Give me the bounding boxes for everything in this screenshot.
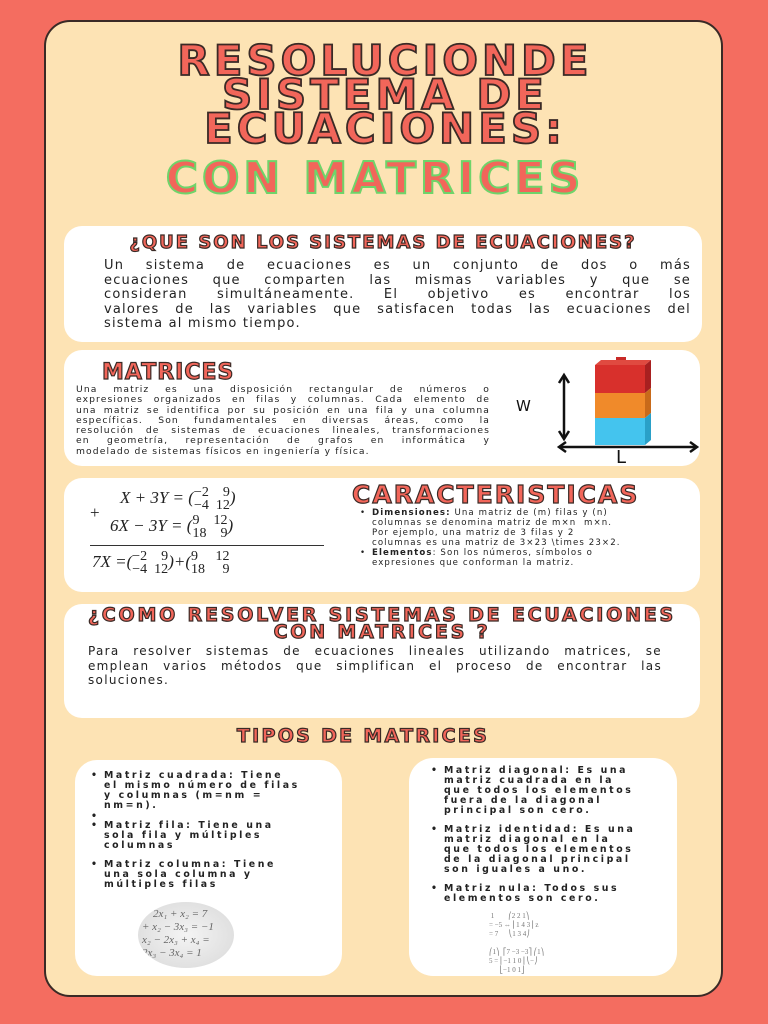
list: fuera de la diagonal bbox=[444, 795, 602, 806]
list: • bbox=[91, 859, 100, 870]
text bbox=[76, 384, 490, 457]
icon: stacked blocks: W bbox=[516, 397, 531, 415]
list: que todos los elementos bbox=[444, 785, 633, 796]
bullet text: columnas es una matriz de 3×23 \times 23×2. bbox=[372, 538, 621, 548]
list bbox=[431, 765, 635, 904]
panel: caracteristicas bbox=[64, 478, 700, 592]
list: Matriz cuadrada: Tiene bbox=[104, 770, 283, 781]
equations: −2 9 bbox=[132, 549, 168, 564]
list: que todos los elementos bbox=[444, 844, 633, 855]
image: equations circle bbox=[138, 902, 234, 968]
equations: 9 12 bbox=[191, 549, 229, 564]
panel: como resolver bbox=[64, 604, 700, 718]
equations: X + 3Y = ( ) bbox=[120, 488, 236, 507]
equations: 18 9 bbox=[191, 562, 229, 577]
equations: + bbox=[90, 503, 100, 522]
bullet text: Por ejemplo, una matriz de 3 filas y 2 bbox=[372, 528, 574, 538]
list: matriz diagonal en la bbox=[444, 834, 610, 845]
text: emplean varios métodos que simplifican el proceso de encontrar las bbox=[88, 658, 662, 672]
text: soluciones. bbox=[88, 673, 169, 687]
list: • bbox=[91, 811, 100, 822]
bullet text: Elementos: Son los números, símbolos o bbox=[372, 548, 593, 558]
list: son iguales a uno. bbox=[444, 864, 587, 875]
text: una matriz se identifica por su posición en una fila y una columna bbox=[76, 405, 490, 416]
text: ecuaciones que comparten las mismas variables y que se bbox=[104, 272, 691, 288]
list: elementos son cero. bbox=[444, 893, 600, 904]
bullet text: expresiones que conforman la matriz. bbox=[372, 558, 574, 568]
list: • bbox=[431, 765, 440, 776]
list: una sola columna y bbox=[104, 869, 253, 880]
text: Un sistema de ecuaciones es un conjunto de dos o más bbox=[104, 258, 691, 273]
bullet text: • bbox=[360, 508, 366, 518]
list bbox=[91, 770, 300, 890]
heading bbox=[88, 604, 676, 643]
text: Para resolver sistemas de ecuaciones lineales utilizando matrices, se bbox=[88, 644, 662, 658]
title: ECUACIONES: bbox=[204, 104, 566, 153]
title: SISTEMA DE bbox=[222, 70, 548, 119]
image: matrices: = −5 ⇔ ⎜1 4 3⎟ z bbox=[489, 921, 539, 929]
title bbox=[177, 36, 593, 153]
list: de la diagonal principal bbox=[444, 854, 631, 865]
list: Matriz identidad: Es una bbox=[444, 824, 635, 835]
image: matrices bbox=[489, 911, 544, 974]
image: matrices: ⎛1⎞ ⎡7 −3 −3⎤ ⎛1⎞ bbox=[489, 948, 544, 956]
equations bbox=[90, 485, 324, 577]
list: • bbox=[431, 824, 440, 835]
list: sola fila y múltiples bbox=[104, 830, 262, 841]
list: columnas bbox=[104, 840, 175, 851]
text: modelado de sistemas físicos en ingeniería y física. bbox=[76, 446, 370, 457]
list: • bbox=[91, 770, 100, 781]
equations: −2 9 bbox=[194, 485, 230, 500]
panel: que son bbox=[64, 226, 702, 342]
list: matriz cuadrada en la bbox=[444, 775, 614, 786]
heading: CON MATRICES ? bbox=[274, 621, 490, 643]
equations: 7X =( )+( bbox=[92, 552, 191, 571]
list: • bbox=[431, 883, 440, 894]
heading: MATRICES bbox=[102, 360, 234, 385]
list: Matriz nula: Todos sus bbox=[444, 883, 619, 894]
bullet text: columnas se denomina matriz de m×n m×n. bbox=[372, 518, 612, 528]
subtitle: CON MATRICES bbox=[166, 153, 584, 204]
image: equations circle: + x₂ − 3x₃ = −1 bbox=[142, 921, 214, 933]
image: equations circle: 2x₁ + x₂ = 7 bbox=[153, 908, 207, 920]
panel: matrices bbox=[64, 350, 700, 466]
image: equations circle: 2x₃ − 3x₄ = 1 bbox=[142, 947, 202, 959]
image: matrices: = 7 ⎝1 3 4⎠ bbox=[489, 930, 530, 938]
panel: tipos left bbox=[75, 760, 342, 976]
heading: CARACTERISTICAS bbox=[352, 480, 639, 509]
text: consideran simultáneamente. El objetivo es encontrar los bbox=[104, 287, 691, 302]
list: múltiples filas bbox=[104, 879, 218, 890]
list: • bbox=[91, 820, 100, 831]
image: equations circle: x₂ − 2x₃ + x₄ = bbox=[142, 934, 210, 946]
text bbox=[104, 258, 691, 331]
list: principal son cero. bbox=[444, 805, 591, 816]
text: resolución de sistemas de ecuaciones lineales, transformaciones bbox=[76, 425, 490, 436]
equations: 18 9 bbox=[192, 526, 227, 541]
list: y columnas (m=nm = bbox=[104, 790, 263, 801]
equations: 9 12 bbox=[192, 513, 227, 528]
bullet text: • bbox=[360, 548, 366, 558]
equations: 6X − 3Y = ( ) bbox=[110, 516, 233, 535]
text: específicas. Son fundamentales en diversas áreas, como la bbox=[76, 415, 490, 426]
equations: −4 12 bbox=[194, 498, 230, 513]
text: Una matriz es una disposición rectangular de números o bbox=[76, 384, 490, 395]
image: matrices: ⎣−1 0 1⎦ bbox=[500, 966, 524, 974]
list: Matriz columna: Tiene bbox=[104, 859, 276, 870]
bullet text bbox=[360, 508, 621, 568]
bullet text: Dimensiones: Una matriz de (m) filas y (n) bbox=[372, 508, 608, 518]
image: matrices: 1 ⎛2 2 1⎞ bbox=[491, 912, 529, 920]
list: Matriz diagonal: Es una bbox=[444, 765, 628, 776]
text: expresiones organizados en filas y columnas. Cada elemento de bbox=[76, 394, 490, 405]
icon: stacked blocks bbox=[516, 357, 699, 465]
heading: ¿COMO RESOLVER SISTEMAS DE ECUACIONES bbox=[88, 604, 676, 626]
equations: −4 12 bbox=[132, 562, 168, 577]
text bbox=[88, 644, 662, 687]
image: matrices: 5 = ⎢−1 1 0⎥ ⎝−⎠ bbox=[489, 957, 538, 965]
list: nm=n). bbox=[104, 800, 158, 811]
heading: ¿QUE SON LOS SISTEMAS DE ECUACIONES? bbox=[129, 232, 637, 253]
list: el mismo número de filas bbox=[104, 780, 300, 791]
text: valores de las variables que satisfacen todas las ecuaciones del bbox=[104, 302, 691, 316]
text: en geometría, representación de grafos en informática y bbox=[76, 435, 490, 446]
title: RESOLUCIONDE bbox=[177, 36, 593, 85]
panel: tipos right bbox=[409, 758, 677, 976]
heading: tipos: TIPOS DE MATRICES bbox=[237, 725, 489, 747]
list: Matriz fila: Tiene una bbox=[104, 820, 274, 831]
text: sistema al mismo tiempo. bbox=[104, 316, 301, 331]
